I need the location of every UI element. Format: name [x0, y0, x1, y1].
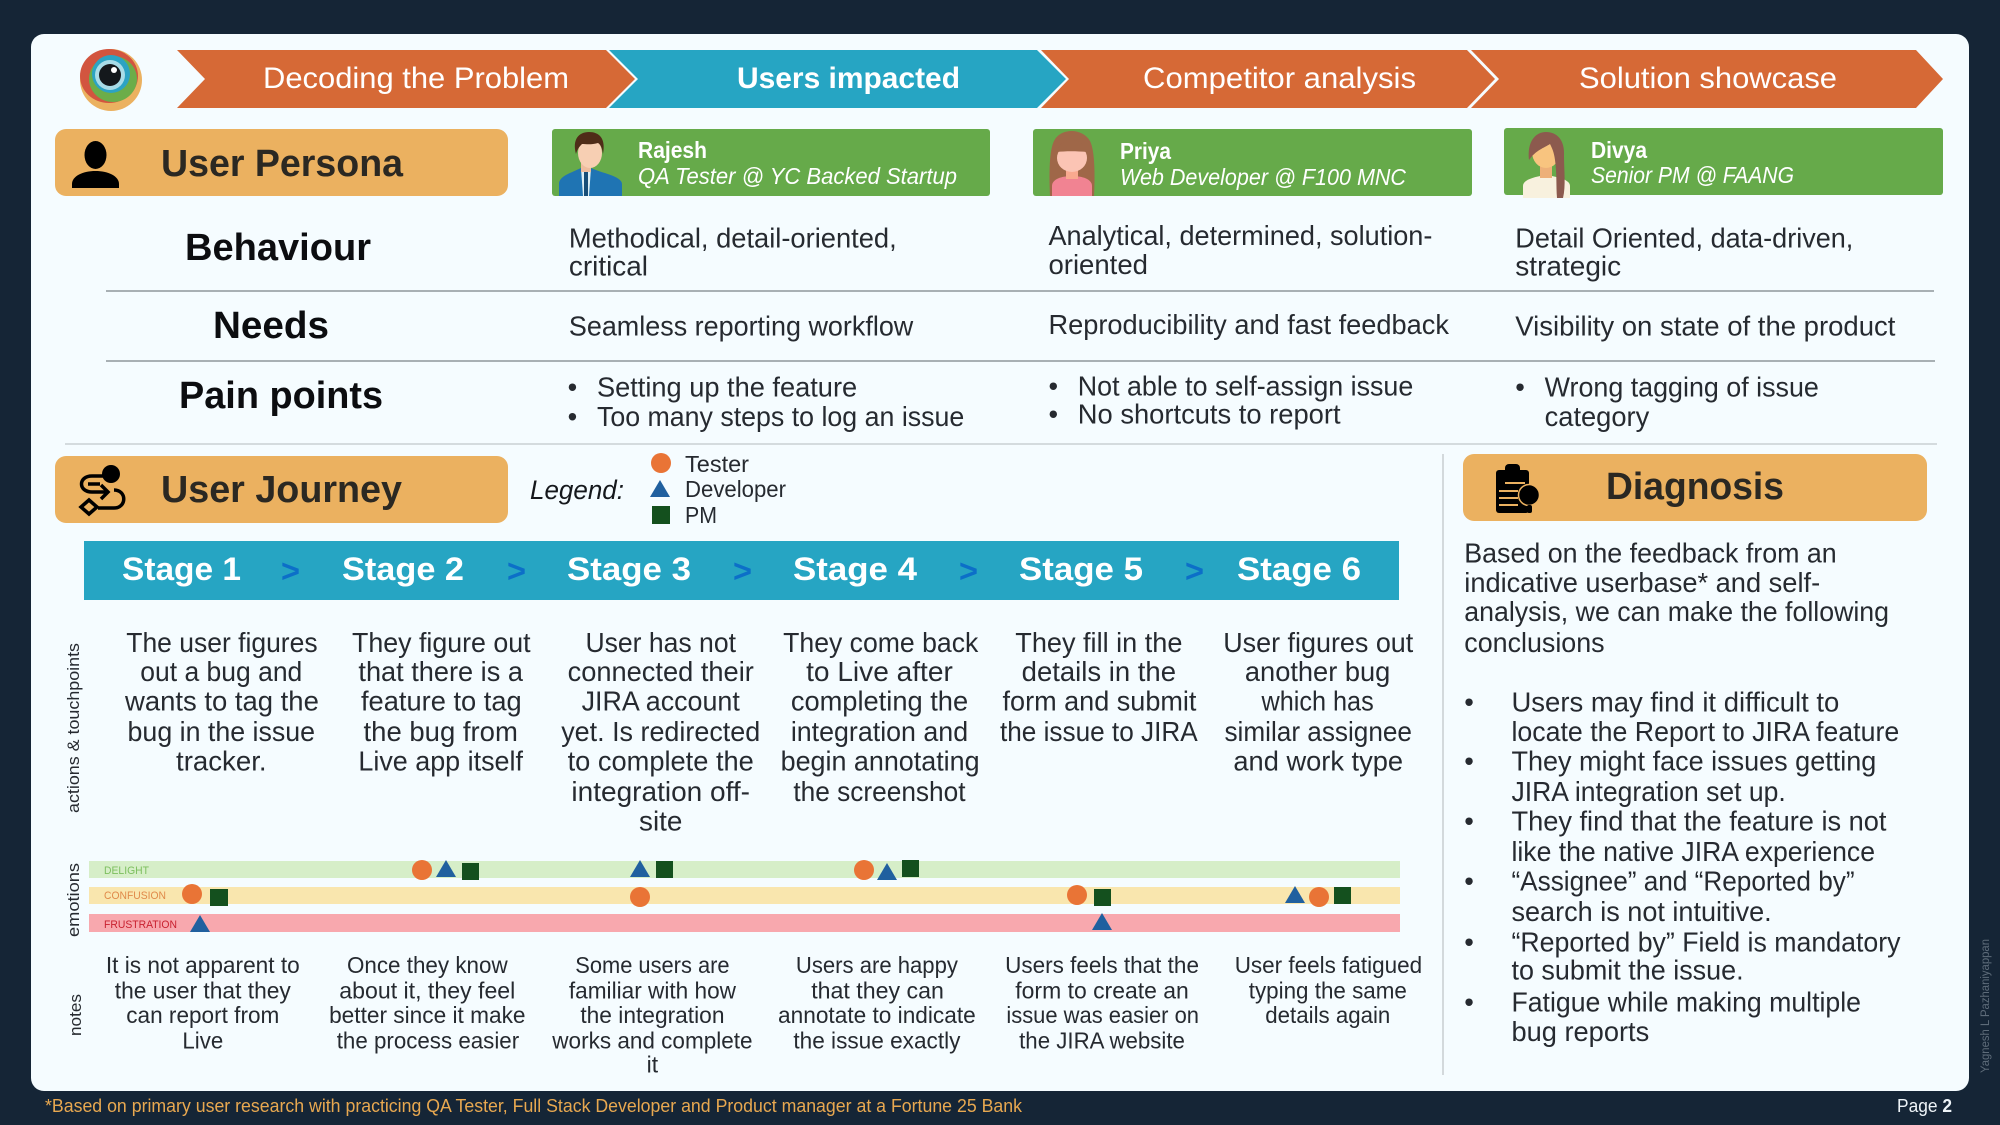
notes: stage 4: the issue exactly	[793, 1027, 961, 1053]
panel: user journey heading: User Journey	[161, 469, 402, 511]
diagnosis conclusions: They find that the feature is not	[1511, 805, 1887, 836]
markers: stage 2	[412, 860, 479, 880]
diagnosis text	[1464, 537, 1901, 1047]
stage actions text	[124, 627, 1414, 836]
diagnosis intro: analysis, we can make the following	[1464, 596, 1889, 627]
diagnosis conclusions: •	[1464, 986, 1474, 1017]
side label: notes: notes	[67, 994, 85, 1036]
persona card: Divya	[1504, 128, 1943, 198]
needs values: Visibility on state of the product	[1515, 310, 1896, 341]
panel: user journey heading	[55, 456, 508, 523]
actions: stage 4: integration and	[791, 716, 968, 747]
actions: stage 1: bug in the issue	[128, 716, 315, 747]
notes: stage 5: form to create an	[1015, 978, 1189, 1004]
actions: stage 1: out a bug and	[140, 656, 302, 687]
diagnosis conclusions	[1464, 687, 1901, 1047]
diagnosis conclusions: locate the Report to JIRA feature	[1511, 716, 1899, 747]
side label: emotions: emotions	[65, 863, 83, 937]
diagnosis conclusions: bug reports	[1511, 1016, 1649, 1047]
behaviour values: oriented	[1048, 249, 1148, 280]
persona card: Rajesh: Rajesh	[638, 137, 707, 163]
page number: Page 2	[1897, 1095, 1952, 1116]
chevron: Users impacted	[609, 50, 1066, 108]
pain point values: •	[568, 401, 577, 432]
actions: stage 3: site	[639, 805, 682, 836]
notes: stage 2: the process easier	[337, 1027, 519, 1053]
chevron: Decoding the Problem	[177, 50, 635, 108]
row heading: Pain points: Pain points	[179, 375, 383, 417]
stage header bar: Stage 2	[342, 551, 464, 587]
band: confusion	[89, 887, 1400, 904]
actions: stage 5: details in the	[1022, 656, 1176, 687]
actions: stage 2: Live app itself	[358, 745, 523, 776]
band: frustration: FRUSTRATION	[104, 919, 177, 931]
band: delight: DELIGHT	[104, 865, 149, 877]
chevron: Competitor analysis	[1041, 50, 1495, 108]
row heading: Needs: Needs	[213, 305, 329, 347]
notes: stage 5: issue was easier on	[1006, 1002, 1199, 1028]
actions: stage 2: They figure out	[352, 627, 531, 658]
actions: stage 3: integration off-	[571, 776, 750, 807]
legend marker: developer	[650, 480, 670, 497]
actions: stage 5: the issue to JIRA	[1000, 716, 1198, 747]
notes: stage 1: Live	[182, 1027, 223, 1053]
notes: stage 3: Some users are	[575, 952, 730, 978]
row: Behaviour	[185, 220, 1853, 282]
actions: stage 1: tracker.	[176, 745, 267, 776]
persona card: Divya: Senior PM @ FAANG	[1591, 162, 1794, 188]
stage header bar: Stage 4	[793, 551, 917, 587]
markers: stage 6	[1285, 886, 1351, 907]
actions: stage 2: the bug from	[364, 716, 518, 747]
row: Pain points	[179, 370, 1819, 432]
diagnosis conclusions: •	[1464, 687, 1474, 718]
needs values	[569, 309, 1896, 341]
actions: stage 6: and work type	[1233, 745, 1403, 776]
diagnosis conclusions: •	[1464, 745, 1474, 776]
diagnosis conclusions: “Reported by” Field is mandatory	[1511, 927, 1901, 958]
actions: stage 4: completing the	[791, 685, 968, 716]
panel: user persona heading: User Persona	[161, 143, 404, 185]
notes: stage 6: typing the same	[1249, 978, 1407, 1004]
stage header bar: Stage 3	[567, 551, 691, 587]
side label: actions and touchpoints: actions & touchpoints	[65, 643, 83, 813]
notes: stage 5: the JIRA website	[1019, 1027, 1185, 1053]
band: confusion: CONFUSION	[104, 890, 166, 902]
actions: stage 6	[1223, 627, 1414, 776]
actions: stage 3: User has not	[585, 627, 736, 658]
pain point values: •	[568, 372, 577, 403]
diagnosis conclusions: to submit the issue.	[1511, 955, 1744, 986]
diagnosis conclusions: like the native JIRA experience	[1511, 836, 1875, 867]
legend: PM	[685, 502, 717, 528]
actions: stage 2	[352, 627, 531, 776]
actions: stage 6: User figures out	[1223, 627, 1414, 658]
diagnosis conclusions: “Assignee” and “Reported by”	[1511, 865, 1855, 896]
chevron: Solution showcase	[1471, 50, 1943, 108]
diagnosis conclusions: Fatigue while making multiple	[1511, 986, 1861, 1017]
persona card: Divya: Divya	[1591, 137, 1647, 163]
chevron: Competitor analysis: Competitor analysis	[1143, 62, 1416, 95]
behaviour values: critical	[569, 251, 648, 282]
diagnosis conclusions: •	[1464, 805, 1474, 836]
notes: stage 2: about it, they feel	[339, 978, 515, 1004]
diagnosis conclusions: They might face issues getting	[1511, 745, 1876, 776]
behaviour values: Analytical, determined, solution-	[1048, 220, 1432, 251]
notes: stage 2: Once they know	[347, 952, 508, 978]
notes: stage 3: works and complete	[551, 1027, 753, 1053]
stage header bar: >	[959, 553, 978, 589]
band: delight	[89, 861, 1400, 878]
actions: stage 2: that there is a	[358, 656, 524, 687]
row heading: Behaviour: Behaviour	[185, 227, 371, 269]
panel: user persona heading	[55, 129, 508, 196]
markers: stage 1	[182, 884, 228, 932]
emotion chart	[89, 860, 1400, 932]
icon: person	[72, 141, 119, 188]
actions: stage 6: which has	[1261, 685, 1374, 716]
markers: stage 3	[630, 860, 673, 907]
legend marker: PM	[652, 506, 670, 524]
actions: stage 1	[124, 627, 319, 776]
markers: stage 5	[1067, 885, 1112, 930]
diagnosis conclusions: JIRA integration set up.	[1511, 776, 1786, 807]
notes: stage 4: Users are happy	[796, 952, 958, 978]
notes: stage 3: the integration	[580, 1002, 724, 1028]
chevron: Users impacted: Users impacted	[737, 62, 960, 95]
chevron: Decoding the Problem: Decoding the Problem	[263, 62, 569, 95]
notes: stage 2: better since it make	[329, 1002, 526, 1028]
actions: stage 4	[781, 627, 980, 807]
notes: stage 3	[551, 952, 753, 1078]
notes: stage 6	[1235, 952, 1422, 1028]
stage header bar: >	[1185, 553, 1204, 589]
notes: stage 4	[778, 952, 976, 1053]
notes: stage 3: it	[647, 1052, 659, 1078]
notes: stage 1: the user that they	[115, 978, 291, 1004]
needs values: Seamless reporting workflow	[569, 310, 913, 341]
legend	[530, 451, 786, 528]
needs values: Reproducibility and fast feedback	[1048, 309, 1449, 340]
actions: stage 3	[561, 627, 760, 836]
actions: stage 6: similar assignee	[1224, 716, 1412, 747]
author credit: Yagnesh L Pazhaniyappan	[1980, 939, 1992, 1073]
icon: logo eye	[80, 49, 142, 111]
pain point values: category	[1545, 401, 1650, 432]
icon: journey route	[81, 465, 124, 514]
diagnosis intro: Based on the feedback from an	[1464, 537, 1837, 568]
actions: stage 4: to Live after	[806, 656, 953, 687]
behaviour values: Methodical, detail-oriented,	[569, 222, 897, 253]
actions: stage 6: another bug	[1245, 656, 1390, 687]
actions: stage 1: The user figures	[126, 627, 318, 658]
notes: stage 1: It is not apparent to	[106, 952, 300, 978]
notes: stage 4: that they can	[811, 978, 944, 1004]
pain point values: Too many steps to log an issue	[597, 401, 964, 432]
actions: stage 4: begin annotating	[781, 745, 980, 776]
diagnosis intro: indicative userbase* and self-	[1464, 567, 1820, 598]
legend: Developer	[685, 476, 786, 502]
navigation chevrons	[177, 50, 1943, 108]
footnote: *Based on primary user research with practicing QA Tester, Full Stack Developer and Product manager at a Fortune 25 Bank	[45, 1095, 1023, 1116]
legend: Legend:	[530, 475, 624, 505]
stage header bar: >	[507, 553, 526, 589]
actions: stage 3: JIRA account	[582, 685, 740, 716]
pain point values: Wrong tagging of issue	[1545, 372, 1819, 403]
actions: stage 5: They fill in the	[1015, 627, 1182, 658]
actions: stage 1: wants to tag the	[124, 685, 319, 716]
pain point values: •	[1515, 372, 1525, 403]
notes: stage 4: annotate to indicate	[778, 1002, 976, 1028]
stage header bar: Stage 1	[122, 551, 241, 587]
pain point values: Not able to self-assign issue	[1078, 370, 1413, 401]
actions: stage 3: yet. Is redirected	[561, 716, 760, 747]
diagnosis conclusions: Users may find it difficult to	[1511, 687, 1839, 718]
behaviour values: strategic	[1515, 251, 1621, 282]
diagnosis intro	[1464, 537, 1889, 658]
behaviour values: Detail Oriented, data-driven,	[1515, 222, 1853, 253]
actions: stage 5: form and submit	[1003, 685, 1197, 716]
stage header bar: Stage 6	[1237, 551, 1361, 587]
persona card: Priya: Priya	[1120, 138, 1171, 164]
avatar: Rajesh	[559, 132, 622, 196]
panel: diagnosis heading: Diagnosis	[1606, 466, 1784, 508]
stage header bar	[84, 541, 1399, 600]
stage notes text	[106, 952, 1422, 1078]
pain point values: •	[1048, 370, 1058, 401]
diagnosis intro: conclusions	[1464, 627, 1605, 658]
notes: stage 6: details again	[1265, 1002, 1390, 1028]
markers: stage 4	[854, 860, 919, 880]
legend marker: tester	[651, 453, 671, 473]
actions: stage 4: They come back	[783, 627, 979, 658]
actions: stage 4: the screenshot	[793, 776, 966, 807]
chevron: Solution showcase: Solution showcase	[1579, 62, 1837, 95]
persona card: Rajesh	[552, 129, 990, 196]
persona card: Priya	[1033, 129, 1472, 196]
pain point values: No shortcuts to report	[1078, 398, 1341, 429]
legend: Tester	[685, 451, 749, 477]
notes: stage 5	[1005, 952, 1199, 1053]
behaviour values	[569, 220, 1853, 282]
notes: stage 2	[329, 952, 526, 1053]
pain point values	[568, 370, 1819, 432]
notes: stage 1	[106, 952, 300, 1053]
avatar: Divya	[1523, 132, 1570, 198]
panel: diagnosis heading	[1463, 454, 1927, 521]
stage header bar: >	[733, 553, 752, 589]
band: frustration	[89, 914, 1400, 932]
notes: stage 5: Users feels that the	[1005, 952, 1199, 978]
diagnosis conclusions: •	[1464, 865, 1474, 896]
pain point values: Setting up the feature	[597, 372, 857, 403]
stage header bar: Stage 5	[1019, 551, 1143, 587]
actions: stage 5	[1000, 627, 1198, 747]
avatar: Priya	[1049, 131, 1095, 196]
icon: clipboard with magnifier	[1496, 464, 1540, 513]
diagnosis conclusions: search is not intuitive.	[1511, 896, 1772, 927]
row: Needs	[213, 305, 1896, 347]
persona card: Rajesh: QA Tester @ YC Backed Startup	[638, 163, 957, 189]
actions: stage 3: to complete the	[568, 745, 754, 776]
notes: stage 3: familiar with how	[569, 978, 736, 1004]
actions: stage 2: feature to tag	[361, 685, 522, 716]
stage header bar: >	[281, 553, 300, 589]
persona card: Priya: Web Developer @ F100 MNC	[1120, 164, 1406, 190]
pain point values: •	[1048, 398, 1058, 429]
notes: stage 1: can report from	[126, 1002, 279, 1028]
diagnosis conclusions: •	[1464, 927, 1474, 958]
actions: stage 3: connected their	[568, 656, 754, 687]
notes: stage 6: User feels fatigued	[1235, 952, 1422, 978]
